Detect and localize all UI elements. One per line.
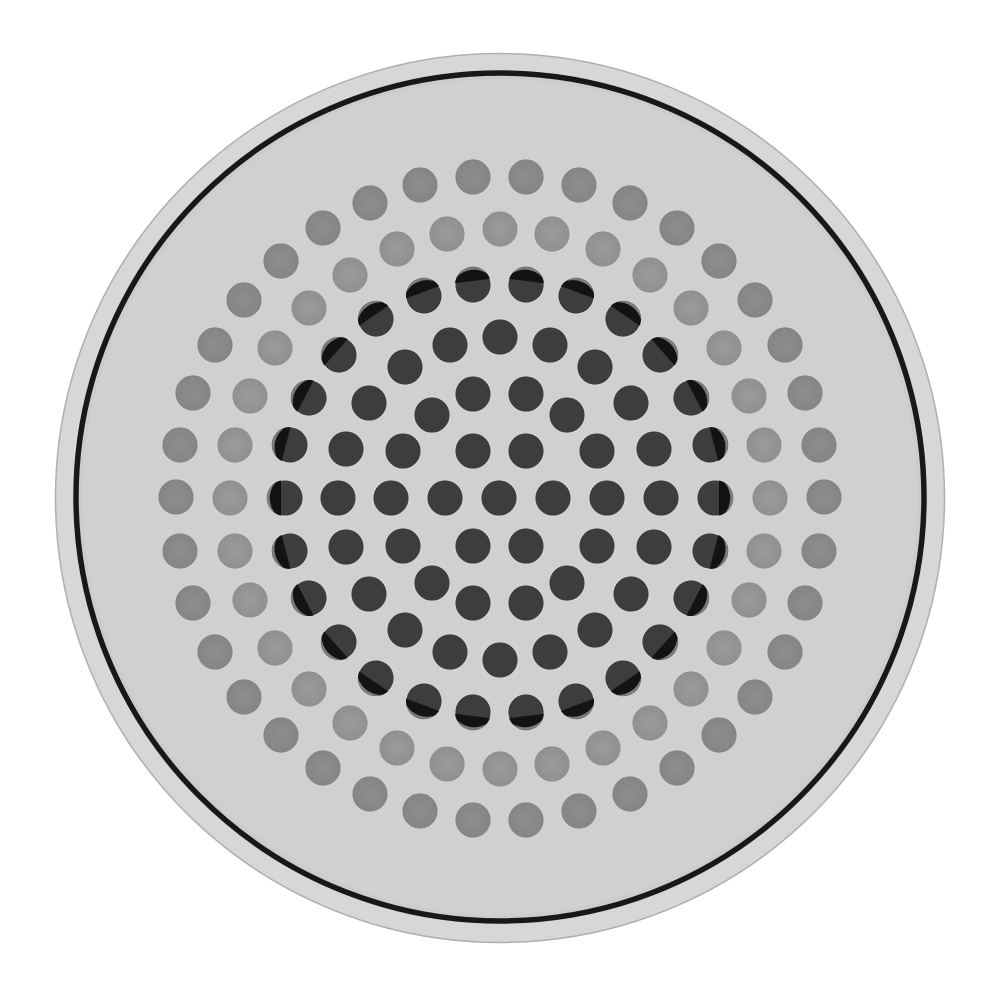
outer rim (56, 54, 944, 942)
black groove (76, 73, 924, 921)
third ring of dark holes with reflections (267, 265, 733, 732)
inner dark holes (320, 319, 679, 678)
inner bevel shade (81, 78, 919, 916)
plate (82, 79, 918, 915)
second ring of holes (212, 211, 788, 787)
outer ring of holes (158, 159, 842, 838)
